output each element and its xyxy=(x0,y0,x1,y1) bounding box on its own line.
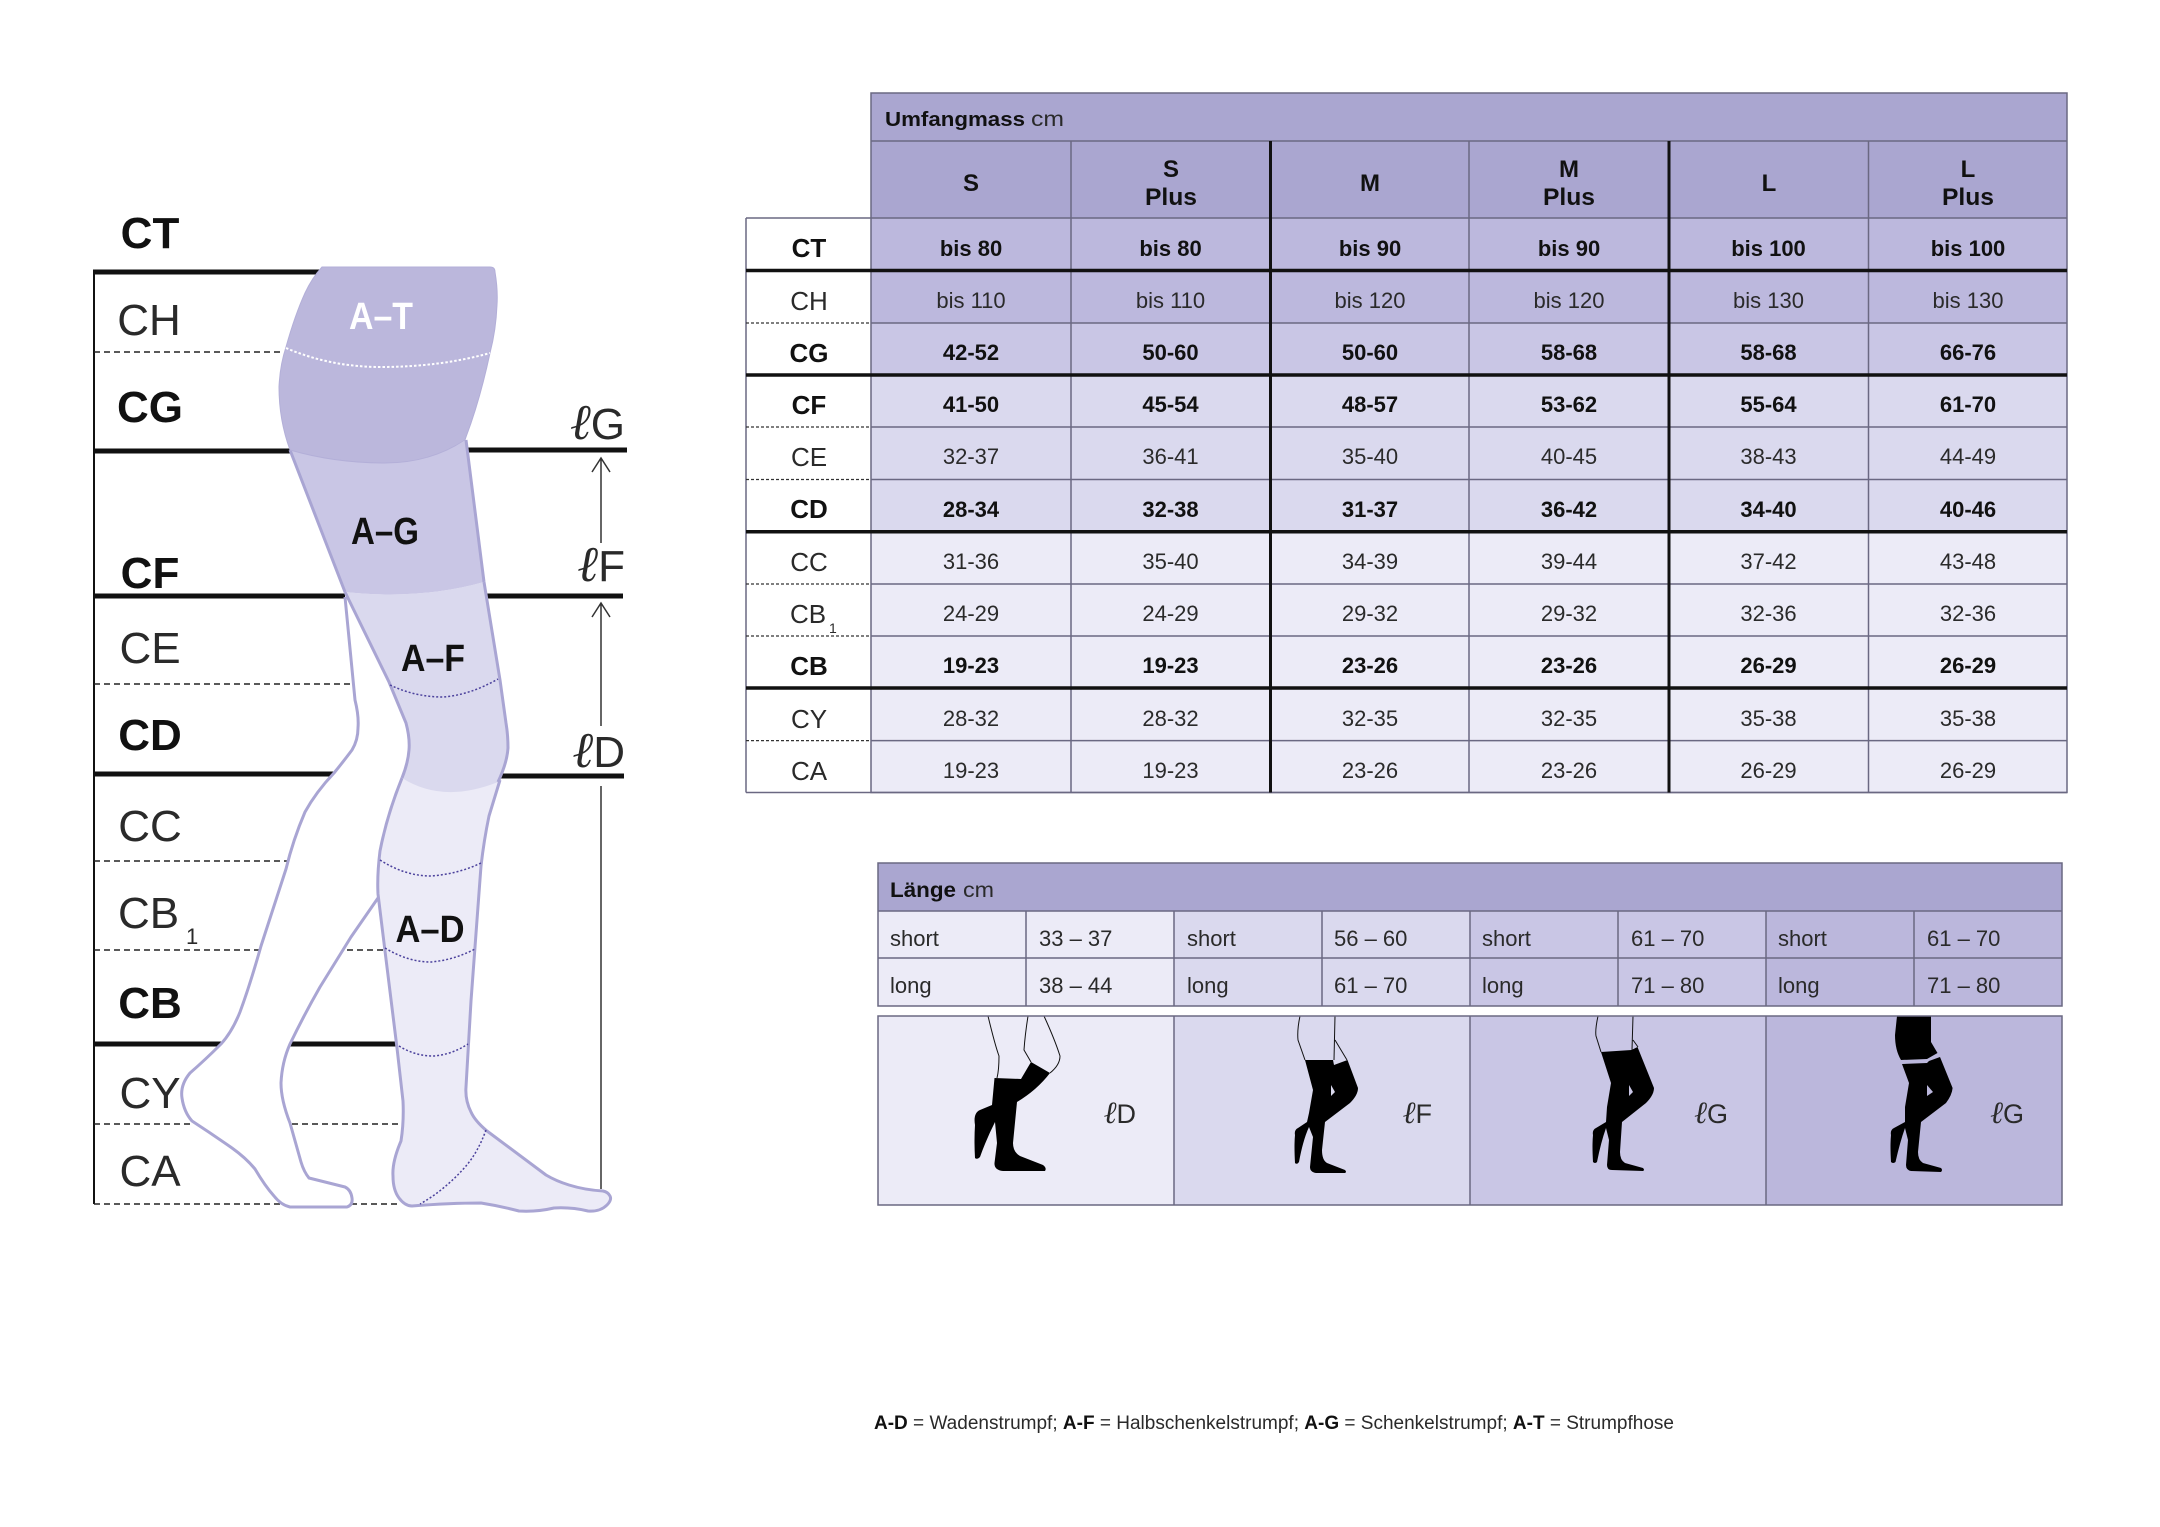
row CG: CG xyxy=(790,338,828,368)
row CC: 39-44 xyxy=(1541,549,1597,574)
seam: calf mid xyxy=(385,948,475,962)
row CH: bis 110 xyxy=(1136,288,1205,313)
row CG: 42-52 xyxy=(943,340,999,365)
panel: half-thigh stocking xyxy=(1174,1016,1470,1205)
row CA: CA xyxy=(791,756,828,786)
row CB1: 29-32 xyxy=(1342,601,1398,626)
long row: 38 – 44 xyxy=(1039,973,1112,998)
size headers: S xyxy=(1163,156,1179,183)
table title xyxy=(885,108,1064,131)
row CT xyxy=(792,233,2005,263)
row CH xyxy=(790,286,2003,316)
row CG: 58-68 xyxy=(1740,340,1797,365)
seam: A-F xyxy=(390,679,498,697)
row CD: CD xyxy=(790,494,828,524)
row CG: 66-76 xyxy=(1940,340,1996,365)
row CC: 37-42 xyxy=(1740,549,1797,574)
row CF: 55-64 xyxy=(1740,392,1797,417)
stocking zone: A-T hip xyxy=(279,267,497,463)
length markers with arrows: ℓG xyxy=(570,394,625,450)
row CY: 28-32 xyxy=(1142,706,1199,731)
row CD: 31-37 xyxy=(1342,497,1398,522)
row CC: 43-48 xyxy=(1940,549,1996,574)
length markers with arrows: ℓD xyxy=(572,722,625,778)
length title: cm xyxy=(963,879,994,902)
row CT: bis 100 xyxy=(1731,236,1806,261)
row CE: 38-43 xyxy=(1740,444,1797,469)
row CB: 26-29 xyxy=(1940,653,1996,678)
size headers: M xyxy=(1559,156,1579,183)
row CB1: 1 xyxy=(829,620,837,636)
size headers: L xyxy=(1762,170,1776,197)
row CH: bis 130 xyxy=(1733,288,1804,313)
row CH: bis 110 xyxy=(936,288,1006,313)
circumference labels left of the leg: CF xyxy=(121,549,179,598)
row CY: CY xyxy=(791,704,827,734)
footnote: A-D = Wadenstrumpf; A-F = Halbschenkelstrumpf; A-G = Schenkelstrumpf; A-T = Strumpfhose xyxy=(874,1413,1674,1434)
short row: short xyxy=(1778,926,1827,951)
stocking A-F outline xyxy=(345,582,508,782)
row CG: 50-60 xyxy=(1342,340,1398,365)
row CF: 45-54 xyxy=(1142,392,1199,417)
table: Umfangmass xyxy=(746,93,2067,792)
row CB1: 29-32 xyxy=(1541,601,1597,626)
size headers: Plus xyxy=(1942,184,1994,211)
circumference labels left of the leg: 1 xyxy=(186,924,198,949)
panel: thigh stocking: ℓG xyxy=(1694,1095,1728,1130)
row CE xyxy=(791,442,1996,472)
circumference labels left of the leg xyxy=(117,209,198,1196)
panel: calf stocking xyxy=(878,1016,1174,1205)
panels: stocking types xyxy=(878,1016,2062,1205)
short row: 61 – 70 xyxy=(1927,926,2000,951)
row CB1: 24-29 xyxy=(1142,601,1199,626)
row CC: 34-39 xyxy=(1342,549,1398,574)
circumference labels left of the leg: CT xyxy=(121,209,179,258)
row CY: 35-38 xyxy=(1740,706,1797,731)
length column backgrounds xyxy=(878,911,2062,1006)
row CH: bis 120 xyxy=(1335,288,1405,313)
row CY: 32-35 xyxy=(1541,706,1597,731)
row CG: 58-68 xyxy=(1541,340,1597,365)
row CD: 36-42 xyxy=(1541,497,1597,522)
row CH: bis 120 xyxy=(1534,288,1604,313)
row CB: 19-23 xyxy=(1142,653,1199,678)
back leg xyxy=(182,597,400,1207)
short row: short xyxy=(1187,926,1236,951)
row backgrounds xyxy=(746,218,2067,792)
length title xyxy=(890,879,994,902)
measurement scale lines xyxy=(93,271,627,1204)
row CB: 26-29 xyxy=(1740,653,1797,678)
row CT: bis 80 xyxy=(1139,236,1202,261)
table title: Umfangmass xyxy=(885,109,1025,131)
row CY: 28-32 xyxy=(943,706,999,731)
short row xyxy=(890,926,2000,951)
row CT: CT xyxy=(792,233,826,263)
row CC: 31-36 xyxy=(943,549,999,574)
row CT: bis 90 xyxy=(1538,236,1600,261)
circumference labels left of the leg: CB xyxy=(118,979,182,1028)
row CB: 19-23 xyxy=(943,653,999,678)
row CE: CE xyxy=(791,442,827,472)
row CA: 26-29 xyxy=(1940,758,1996,783)
short row: 56 – 60 xyxy=(1334,926,1407,951)
label: A-D: A–D xyxy=(396,909,464,951)
seam: calf lower xyxy=(399,1044,468,1056)
seam: A-T xyxy=(286,348,490,367)
row CB1: 32-36 xyxy=(1740,601,1797,626)
row CY: 35-38 xyxy=(1940,706,1996,731)
seam: calf upper xyxy=(380,860,481,876)
circumference labels left of the leg: CC xyxy=(118,802,182,851)
row CF: 53-62 xyxy=(1541,392,1597,417)
row CB1: 24-29 xyxy=(943,601,999,626)
length title: Länge xyxy=(890,879,956,902)
short row: 33 – 37 xyxy=(1039,926,1112,951)
row CY: 32-35 xyxy=(1342,706,1398,731)
row CE: 32-37 xyxy=(943,444,999,469)
table header band xyxy=(871,93,2067,218)
size headers xyxy=(963,156,1994,211)
row CT: bis 80 xyxy=(940,236,1002,261)
size headers: Plus xyxy=(1145,184,1197,211)
size headers: S xyxy=(963,170,979,197)
row CC: 35-40 xyxy=(1142,549,1199,574)
row CA: 26-29 xyxy=(1740,758,1797,783)
panel: tights xyxy=(1766,1016,2062,1205)
row CF xyxy=(792,390,1996,420)
row CB: 23-26 xyxy=(1342,653,1398,678)
row CB1: 32-36 xyxy=(1940,601,1996,626)
length markers with arrows xyxy=(570,394,625,1189)
size headers: L xyxy=(1961,156,1975,183)
row CA: 23-26 xyxy=(1541,758,1597,783)
row CA: 23-26 xyxy=(1342,758,1398,783)
table: Länge xyxy=(878,863,2062,1006)
length grid xyxy=(878,863,2062,1006)
short row: short xyxy=(1482,926,1531,951)
row CA: 19-23 xyxy=(1142,758,1199,783)
panel: thigh stocking xyxy=(1470,1016,1766,1205)
circumference labels left of the leg: CH xyxy=(117,296,181,345)
row CB: 23-26 xyxy=(1541,653,1597,678)
short row: 61 – 70 xyxy=(1631,926,1704,951)
circumference labels left of the leg: CD xyxy=(118,711,182,760)
row CB1: CB xyxy=(790,599,826,629)
row CE: 36-41 xyxy=(1142,444,1199,469)
row CB xyxy=(790,651,1996,681)
circumference labels left of the leg: CE xyxy=(119,624,181,673)
circumference labels left of the leg: CB xyxy=(118,889,179,938)
row CE: 40-45 xyxy=(1541,444,1597,469)
row CE: 44-49 xyxy=(1940,444,1996,469)
long row: 61 – 70 xyxy=(1334,973,1407,998)
long row xyxy=(890,973,2000,998)
table title: cm xyxy=(1031,108,1064,131)
leg illustration xyxy=(182,267,611,1211)
row CD: 40-46 xyxy=(1940,497,1996,522)
stocking zone: A-D calf xyxy=(378,778,611,1211)
row CF: 41-50 xyxy=(943,392,999,417)
circumference labels left of the leg: CA xyxy=(119,1147,181,1196)
label: A-F: A–F xyxy=(401,638,465,680)
stocking A-G outline xyxy=(290,440,484,592)
row CT: bis 90 xyxy=(1339,236,1401,261)
row CA xyxy=(791,756,1996,786)
length header band xyxy=(878,863,2062,911)
size headers: M xyxy=(1360,170,1380,197)
row CY xyxy=(791,704,1996,734)
row CD xyxy=(790,494,1996,524)
row CT: bis 100 xyxy=(1931,236,2005,261)
size headers: Plus xyxy=(1543,184,1595,211)
seam: ankle xyxy=(420,1130,486,1204)
row CA: 19-23 xyxy=(943,758,999,783)
row CG xyxy=(790,338,1996,368)
row CH: CH xyxy=(790,286,828,316)
label: A-T: A–T xyxy=(349,296,413,338)
row CF: 61-70 xyxy=(1940,392,1996,417)
panel: half-thigh stocking: ℓF xyxy=(1403,1095,1432,1130)
long row: 71 – 80 xyxy=(1631,973,1704,998)
row CD: 28-34 xyxy=(943,497,1000,522)
stocking zone: A-F thigh xyxy=(345,582,508,792)
row CC xyxy=(790,547,1996,577)
long row: long xyxy=(890,973,932,998)
row CB1 xyxy=(790,599,1996,636)
label: A-G: A–G xyxy=(351,511,419,553)
circumference labels left of the leg: CY xyxy=(119,1069,181,1118)
row CD: 32-38 xyxy=(1142,497,1199,522)
length markers with arrows: ℓF xyxy=(577,536,625,592)
circumference labels left of the leg: CG xyxy=(117,383,183,432)
panel borders xyxy=(878,1016,2062,1205)
table grid xyxy=(746,93,2067,792)
row CF: 48-57 xyxy=(1342,392,1398,417)
long row: long xyxy=(1187,973,1229,998)
short row: short xyxy=(890,926,939,951)
long row: 71 – 80 xyxy=(1927,973,2000,998)
row CD: 34-40 xyxy=(1740,497,1797,522)
row CF: CF xyxy=(792,390,826,420)
stocking zone: A-G upper thigh xyxy=(290,440,484,594)
row CG: 50-60 xyxy=(1142,340,1199,365)
long row: long xyxy=(1482,973,1524,998)
row CH: bis 130 xyxy=(1933,288,2003,313)
panel: calf stocking: ℓD xyxy=(1104,1095,1136,1130)
panel: tights: ℓG xyxy=(1990,1095,2024,1130)
row CE: 35-40 xyxy=(1342,444,1398,469)
row CC: CC xyxy=(790,547,828,577)
row CB: CB xyxy=(790,651,828,681)
long row: long xyxy=(1778,973,1820,998)
